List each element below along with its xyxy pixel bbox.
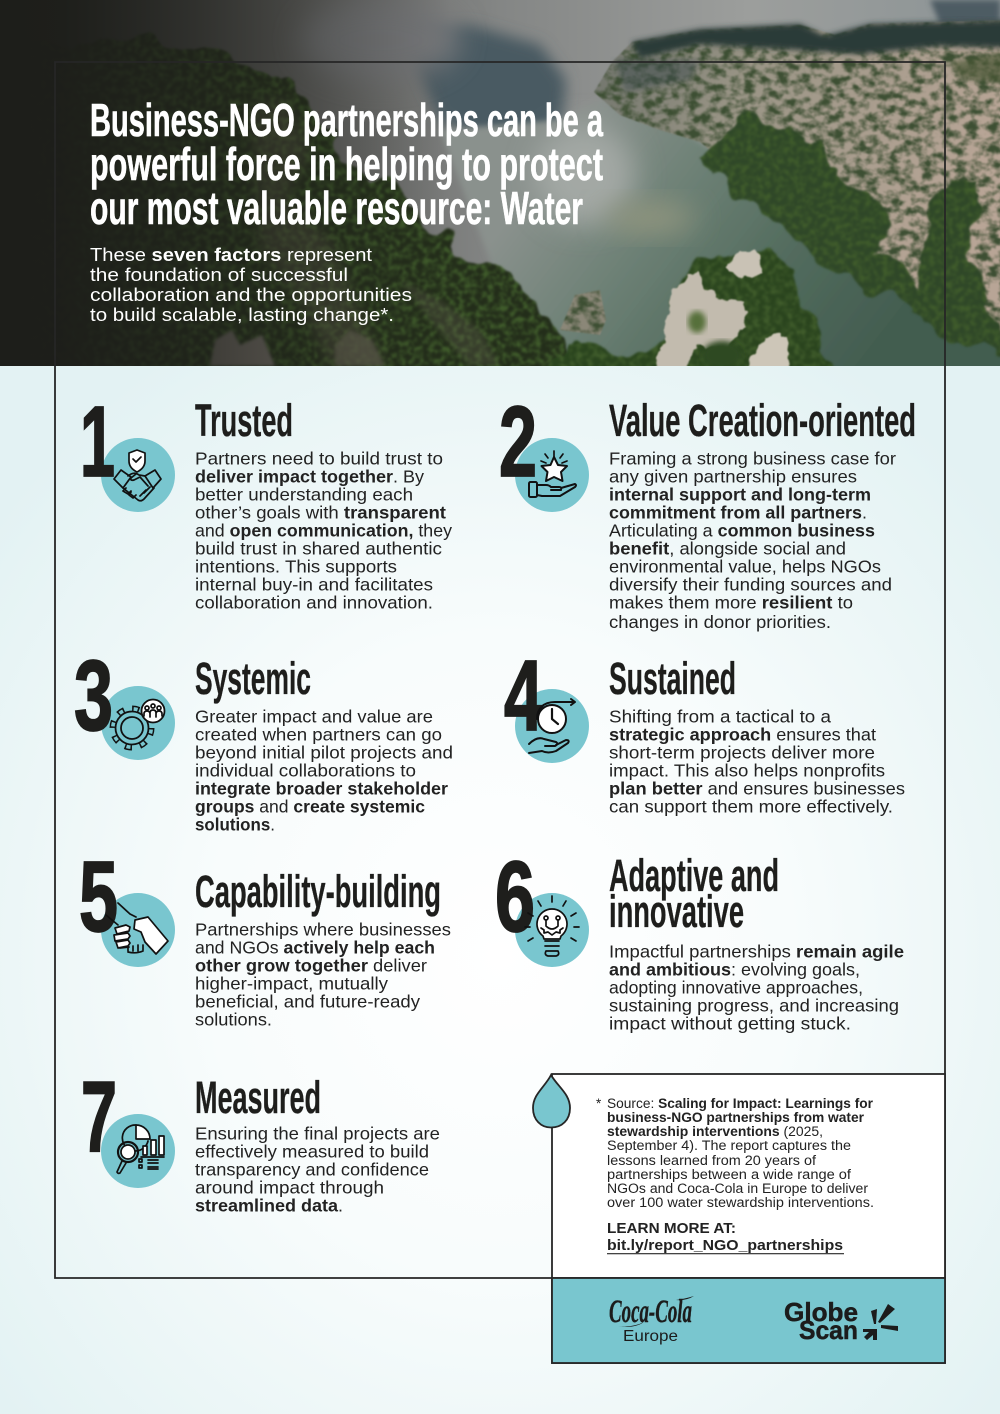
headline: Business-NGO partnerships can be a	[90, 94, 603, 146]
source text	[596, 1096, 874, 1210]
source text: lessons learned from 20 years of	[607, 1153, 816, 1168]
body text: short-term projects deliver more	[609, 742, 875, 762]
intro text: collaboration and the opportunities	[90, 284, 412, 305]
heading: Sustained	[609, 653, 736, 704]
body text: around impact through	[195, 1178, 384, 1198]
body text: Impactful partnerships remain agile	[609, 942, 904, 962]
body text: diversify their funding sources and	[609, 574, 892, 594]
body text: individual collaborations to	[195, 760, 416, 780]
factor 6: adaptive and innovative	[495, 841, 904, 1034]
body text	[195, 920, 451, 1030]
body text: commitment from all partners .	[609, 502, 867, 522]
body text: changes in donor priorities.	[609, 612, 831, 632]
body text	[195, 448, 452, 612]
body text: collaboration and innovation.	[195, 592, 433, 612]
heading: Capability-building	[195, 866, 441, 917]
body text: internal buy-in and facilitates	[195, 574, 433, 594]
logo: Coca-Cola Europe	[609, 1294, 694, 1345]
source text: *	[596, 1096, 601, 1111]
icon: handshake and shield	[80, 386, 175, 512]
logo: Coca-Cola Europe: Europe	[623, 1328, 678, 1345]
body text: other’s goals with transparent	[195, 502, 446, 522]
source text: stewardship interventions (2025,	[607, 1124, 823, 1139]
learn more link: bit.ly/report_NGO_partnerships	[607, 1237, 843, 1254]
factor 2: value creation	[499, 386, 916, 632]
page background	[0, 366, 1000, 1414]
icon: clock over hand	[504, 640, 589, 763]
body text	[609, 706, 905, 816]
intro text	[90, 244, 412, 325]
icon: star over open hand	[499, 386, 589, 512]
icon: clock over hand: 4	[504, 640, 543, 752]
body text: environmental value, helps NGOs	[609, 556, 881, 576]
icon: magnifier and charts	[81, 1061, 175, 1188]
heading	[609, 850, 779, 937]
body text: created when partners can go	[195, 724, 442, 744]
body text: groups and create systemic	[195, 796, 425, 816]
logo: Coca-Cola Europe: Coca-Cola	[609, 1294, 692, 1330]
body text: deliver impact together . By	[195, 466, 424, 486]
body text: any given partnership ensures	[609, 466, 857, 486]
source text: business-NGO partnerships from water	[607, 1110, 865, 1125]
body text: and open communication, they	[195, 520, 452, 540]
panel: logos	[552, 1278, 945, 1363]
icon: clasped hands	[79, 841, 175, 967]
body text: and ambitious: evolving goals,	[609, 960, 860, 980]
body text: other grow together deliver	[195, 956, 427, 976]
icon: gear and people: 3	[74, 640, 113, 752]
headline	[90, 94, 603, 234]
source text: September 4). The report captures the	[607, 1138, 851, 1153]
body text: intentions. This supports	[195, 556, 397, 576]
body text: effectively measured to build	[195, 1142, 429, 1162]
body text: Shifting from a tactical to a	[609, 706, 831, 726]
body text: and NGOs actively help each	[195, 938, 435, 958]
icon: gear and people	[74, 640, 175, 760]
factor 1: trusted	[80, 386, 452, 612]
body text: strategic approach ensures that	[609, 724, 876, 744]
heading: innovative	[609, 886, 744, 937]
body text: beneficial, and future-ready	[195, 992, 420, 1012]
heading: Measured	[195, 1072, 321, 1123]
body text: transparency and confidence	[195, 1160, 429, 1180]
learn more link: LEARN MORE AT:	[607, 1220, 736, 1237]
logo: GlobeScan	[784, 1297, 898, 1345]
body text: better understanding each	[195, 484, 413, 504]
body text: Articulating a common business	[609, 520, 875, 540]
island	[560, 290, 606, 335]
icon: light bulb with gear	[495, 841, 589, 967]
right cliff	[594, 20, 1000, 350]
body text	[609, 448, 896, 632]
body text: impact. This also helps nonprofits	[609, 760, 885, 780]
logo: GlobeScan: Globe	[784, 1297, 858, 1327]
heading: Trusted	[195, 395, 293, 446]
factor 4: sustained	[504, 640, 905, 816]
intro text: the foundation of successful	[90, 264, 348, 285]
source text: over 100 water stewardship interventions.	[607, 1195, 874, 1210]
intro text: to build scalable, lasting change*.	[90, 304, 394, 325]
body text: can support them more effectively.	[609, 796, 893, 816]
body text: Partnerships where businesses	[195, 920, 451, 940]
body text: integrate broader stakeholder	[195, 778, 448, 798]
icon: clasped hands: 5	[79, 841, 118, 953]
body text: adopting innovative approaches,	[609, 978, 863, 998]
panel: source note	[533, 1074, 945, 1278]
factor 5: capability-building	[79, 841, 451, 1030]
hero photo	[0, 0, 1000, 400]
body text: build trust in shared authentic	[195, 538, 442, 558]
logo: GlobeScan: Scan	[799, 1315, 858, 1345]
body text: impact without getting stuck.	[609, 1014, 851, 1034]
body text: sustaining progress, and increasing	[609, 996, 899, 1016]
body text: Partners need to build trust to	[195, 448, 443, 468]
intro text: These seven factors represent	[90, 244, 372, 265]
icon: light bulb with gear: 6	[495, 841, 535, 953]
body text: Greater impact and value are	[195, 706, 433, 726]
body text: benefit, alongside social and	[609, 538, 846, 558]
body text	[609, 942, 904, 1034]
headline: our most valuable resource: Water	[90, 182, 583, 234]
body text: makes them more resilient to	[609, 592, 853, 612]
body text: streamlined data.	[195, 1196, 343, 1216]
heading: Adaptive and	[609, 850, 779, 901]
factor 3: systemic	[74, 640, 453, 834]
icon: magnifier and charts: 7	[81, 1061, 117, 1173]
source text: NGOs and Coca-Cola in Europe to deliver	[607, 1181, 869, 1196]
source text: partnerships between a wide range of	[607, 1167, 851, 1182]
icon: water drop	[533, 1075, 570, 1128]
body text: higher-impact, mutually	[195, 974, 388, 994]
heading: Systemic	[195, 653, 311, 704]
headline: powerful force in helping to protect	[90, 138, 603, 190]
factor 7: measured	[81, 1061, 440, 1216]
body text: Framing a strong business case for	[609, 448, 896, 468]
left forest	[124, 34, 568, 366]
icon: star over open hand: 2	[499, 386, 537, 498]
body text: Ensuring the final projects are	[195, 1124, 440, 1144]
body text: internal support and long-term	[609, 484, 871, 504]
source text: Source: Scaling for Impact: Learnings for	[607, 1096, 874, 1111]
body text: solutions.	[195, 1010, 272, 1030]
body text: plan better and ensures businesses	[609, 778, 905, 798]
body text	[195, 1124, 440, 1216]
body text	[195, 706, 453, 834]
icon: handshake and shield: 1	[80, 386, 115, 498]
learn more link	[607, 1220, 844, 1254]
body text: beyond initial pilot projects and	[195, 742, 453, 762]
body text: solutions.	[195, 814, 275, 834]
